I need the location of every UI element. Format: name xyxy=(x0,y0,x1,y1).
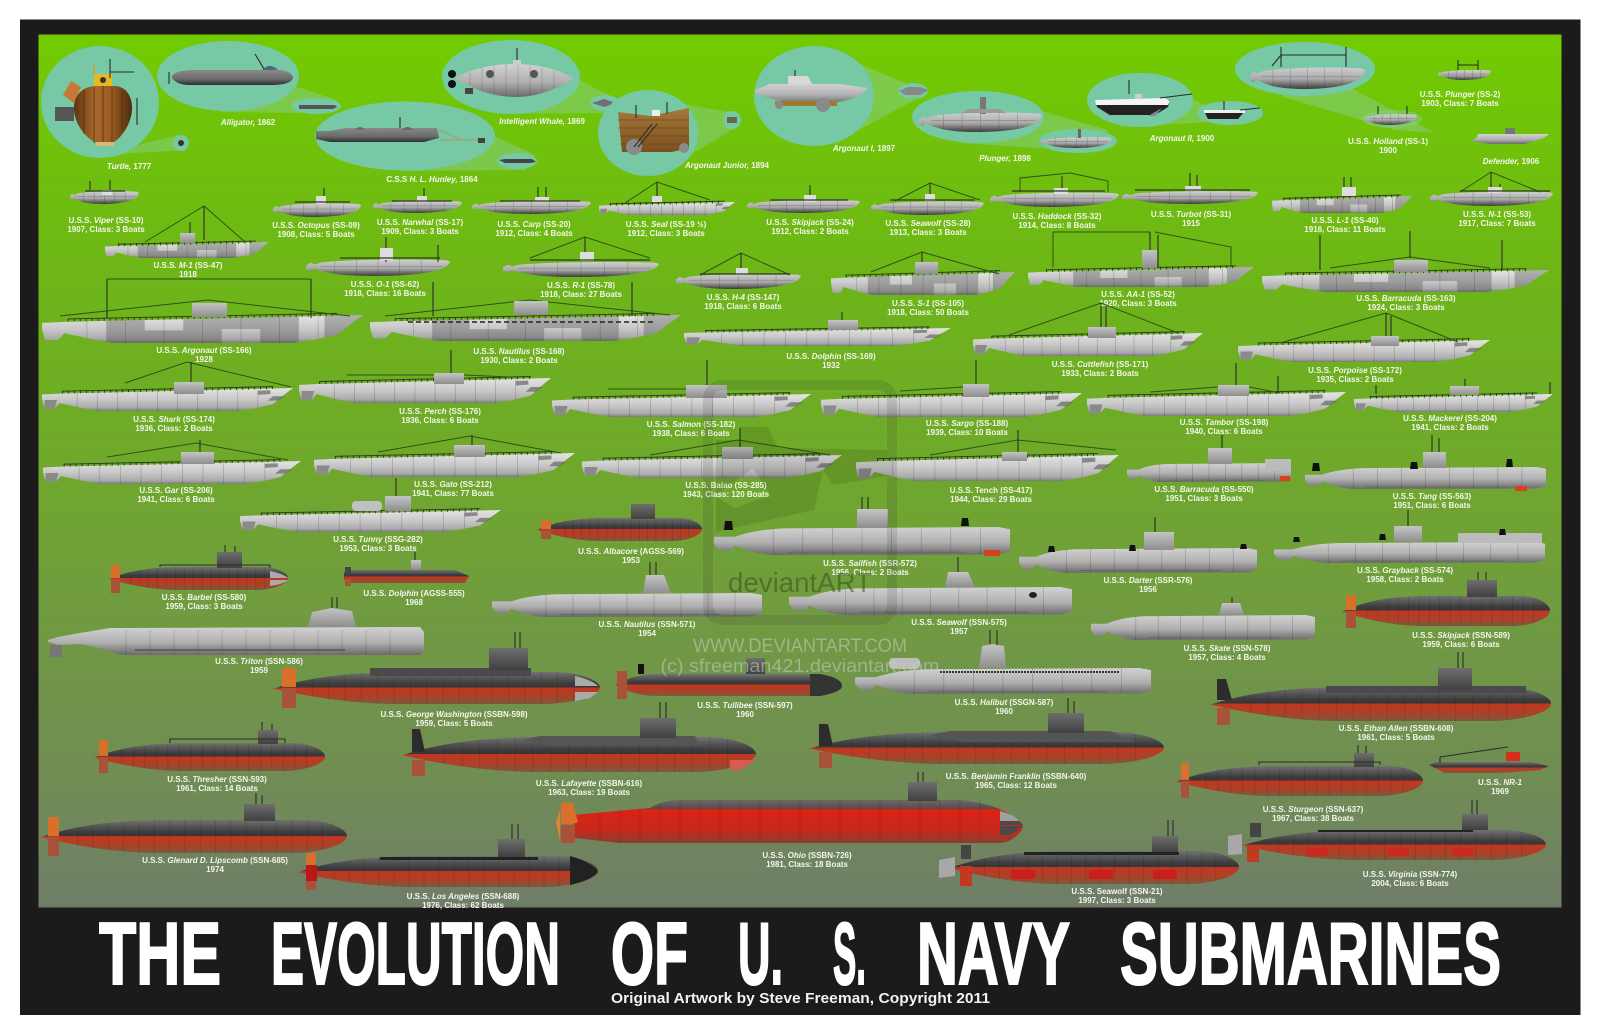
submarine: Tunny xyxy=(240,478,501,553)
caption: Argonaut II, 1900 xyxy=(1149,134,1215,143)
caption: U.S.S. Halibut (SSGN-587) xyxy=(955,698,1053,707)
caption: 1939, Class: 10 Boats xyxy=(926,428,1008,437)
watermark: site url: WWW.DEVIANTART.COM xyxy=(693,636,907,657)
caption: U.S.S. Sargo (SS-188) xyxy=(926,419,1008,428)
caption: U.S.S. Triton (SSN-586) xyxy=(215,657,303,666)
caption: U.S.S. Turbot (SS-31) xyxy=(1151,210,1231,219)
caption: U.S.S. Sturgeon (SSN-637) xyxy=(1263,805,1363,814)
caption: U.S.S. Argonaut (SS-166) xyxy=(156,346,252,355)
submarine: Barracuda SS-550 xyxy=(1127,435,1291,503)
caption: 1967, Class: 38 Boats xyxy=(1272,814,1354,823)
caption: 1941, Class: 2 Boats xyxy=(1411,423,1489,432)
submarine: Dolphin SS-169 xyxy=(684,312,951,370)
submarine: Carp xyxy=(472,187,591,238)
caption: U.S.S. Thresher (SSN-593) xyxy=(167,775,267,784)
caption: 1951, Class: 6 Boats xyxy=(1393,501,1471,510)
submarine: H-4 xyxy=(676,253,801,311)
submarine: Skipjack SS-24 xyxy=(747,185,860,236)
submarine: Turtle xyxy=(41,46,189,171)
caption: 1956 xyxy=(1139,585,1157,594)
submarine: Seal xyxy=(599,182,735,238)
caption: 1930, Class: 2 Boats xyxy=(480,356,558,365)
caption: U.S.S. NR-1 xyxy=(1478,778,1522,787)
caption: U.S.S. Tench (SS-417) xyxy=(950,486,1032,495)
caption: Argonaut I, 1897 xyxy=(832,144,896,153)
caption: U.S.S. Darter (SSR-576) xyxy=(1104,576,1192,585)
caption: 1976, Class: 62 Boats xyxy=(422,901,504,910)
caption: U.S.S. R-1 (SS-78) xyxy=(547,281,615,290)
caption: U.S.S. Nautilus (SS-168) xyxy=(473,347,565,356)
submarine: Barracuda SS-163 xyxy=(1262,231,1549,312)
caption: U.S.S. N-1 (SS-53) xyxy=(1463,210,1531,219)
caption: 1907, Class: 3 Boats xyxy=(67,225,145,234)
submarine: R-1 xyxy=(503,237,659,299)
submarine: Haddock xyxy=(990,173,1119,230)
caption: 1918, Class: 27 Boats xyxy=(540,290,622,299)
caption: U.S.S. S-1 (SS-105) xyxy=(892,299,964,308)
caption: 1941, Class: 6 Boats xyxy=(137,495,215,504)
submarine: L-1 xyxy=(1272,177,1412,234)
caption: 1918, Class: 50 Boats xyxy=(887,308,969,317)
submarine: Los Angeles xyxy=(298,824,598,910)
submarine: Mackerel xyxy=(1354,379,1553,432)
submarine: Gar xyxy=(43,440,301,504)
caption: 1908, Class: 5 Boats xyxy=(277,230,355,239)
title: S. xyxy=(833,904,866,1003)
caption: 1940, Class: 6 Boats xyxy=(1185,427,1263,436)
caption: U.S.S. O-1 (SS-62) xyxy=(351,280,419,289)
caption: U.S.S. Dolphin (SS-169) xyxy=(786,352,876,361)
submarine: Glenard D. Lipscomb xyxy=(41,793,347,874)
caption: 1959, Class: 3 Boats xyxy=(165,602,243,611)
caption: Defender, 1906 xyxy=(1483,157,1540,166)
submarine: Grayback xyxy=(1274,510,1545,584)
caption: 1912, Class: 2 Boats xyxy=(771,227,849,236)
caption: 1903, Class: 7 Boats xyxy=(1421,99,1499,108)
caption: 1954 xyxy=(638,629,656,638)
submarine: Plunger 1898 xyxy=(912,91,1117,163)
submarine: U.S.S. Holland xyxy=(1235,42,1435,155)
title: U. xyxy=(738,904,783,1003)
caption: 1974 xyxy=(206,865,224,874)
submarine: Narwhal xyxy=(373,188,463,236)
caption: U.S.S. L-1 (SS-40) xyxy=(1311,216,1379,225)
submarine: Darter xyxy=(1019,517,1257,594)
caption: U.S.S. Ohio (SSBN-726) xyxy=(762,851,852,860)
caption: U.S.S. Seawolf (SS-28) xyxy=(885,219,971,228)
caption: 1936, Class: 6 Boats xyxy=(401,416,479,425)
submarine: N-1 xyxy=(1430,172,1553,228)
caption: 1953 xyxy=(622,556,640,565)
submarine: Skate xyxy=(1091,597,1315,662)
submarine: AA-1 xyxy=(1028,232,1254,308)
title: OF xyxy=(611,904,688,1003)
submarine: Lafayette xyxy=(402,702,756,797)
submarine: Skipjack SSN-589 xyxy=(1342,572,1550,649)
caption: Turtle, 1777 xyxy=(107,162,152,171)
caption: 1928 xyxy=(195,355,213,364)
submarine: U.S.S. Plunger SS-2 xyxy=(1420,60,1501,108)
caption: U.S.S. Ethan Allen (SSBN-608) xyxy=(1339,724,1453,733)
submarine: Salmon xyxy=(552,360,811,438)
submarine: Halibut xyxy=(855,630,1151,716)
submarine: Intelligent Whale xyxy=(442,40,620,126)
submarine: Octopus xyxy=(272,188,361,239)
caption: 1956, Class: 2 Boats xyxy=(831,568,909,577)
caption: U.S.S. Balao (SS-285) xyxy=(685,481,767,490)
caption: U.S.S. Albacore (AGSS-569) xyxy=(578,547,684,556)
caption: U.S.S. Skipjack (SS-24) xyxy=(766,218,854,227)
caption: U.S.S. Salmon (SS-182) xyxy=(647,420,735,429)
submarine: Defender xyxy=(1472,128,1549,166)
caption: U.S.S. Grayback (SS-574) xyxy=(1357,566,1453,575)
submarine: Benjamin Franklin xyxy=(809,698,1164,790)
caption: 2004, Class: 6 Boats xyxy=(1371,879,1449,888)
caption: 1912, Class: 3 Boats xyxy=(627,229,705,238)
submarine: Sailfish xyxy=(714,497,1010,577)
caption: U.S.S. Seawolf (SSN-21) xyxy=(1071,887,1163,896)
caption: 1963, Class: 19 Boats xyxy=(548,788,630,797)
caption: Plunger, 1898 xyxy=(979,154,1031,163)
caption: Alligator, 1862 xyxy=(220,118,276,127)
caption: U.S.S. Shark (SS-174) xyxy=(133,415,215,424)
caption: 1965, Class: 12 Boats xyxy=(975,781,1057,790)
submarine: Shark xyxy=(42,362,293,433)
caption: U.S.S. H-4 (SS-147) xyxy=(707,293,779,302)
caption: U.S.S. AA-1 (SS-52) xyxy=(1101,290,1175,299)
submarine: Ohio xyxy=(556,772,1023,869)
credit line: Original Artwork by Steve Freeman, Copyright 2011 xyxy=(611,991,990,1007)
caption: C.S.S H. L. Hunley, 1864 xyxy=(386,175,478,184)
submarine: George Washington xyxy=(273,632,600,728)
caption: U.S.S. Narwhal (SS-17) xyxy=(377,218,463,227)
caption: U.S.S. Tambor (SS-198) xyxy=(1180,418,1268,427)
submarine: Ethan Allen xyxy=(1210,652,1551,742)
submarine: Cuttlefish xyxy=(973,303,1203,378)
caption: U.S.S. Perch (SS-176) xyxy=(399,407,481,416)
caption: 1924, Class: 3 Boats xyxy=(1367,303,1445,312)
submarine: Tambor xyxy=(1087,363,1346,436)
submarine: Alligator xyxy=(157,41,341,127)
submarine: Viper xyxy=(67,180,145,234)
caption: U.S.S. Gar (SS-206) xyxy=(139,486,213,495)
caption: 1960 xyxy=(736,710,754,719)
submarine: Gato xyxy=(314,435,575,498)
caption: 1920, Class: 3 Boats xyxy=(1099,299,1177,308)
watermark: deviantART logo xyxy=(708,385,892,620)
submarine: O-1 xyxy=(306,237,450,298)
submarine: Seawolf SS-28 xyxy=(871,183,984,237)
caption: U.S.S. Sailfish (SSR-572) xyxy=(823,559,917,568)
caption: 1913, Class: 3 Boats xyxy=(889,228,967,237)
caption: U.S.S. Nautilus (SSN-571) xyxy=(599,620,695,629)
caption: U.S.S. Glenard D. Lipscomb (SSN-685) xyxy=(142,856,288,865)
caption: 1981, Class: 18 Boats xyxy=(766,860,848,869)
caption: U.S.S. Seal (SS-19 ½) xyxy=(626,220,706,229)
caption: 1909, Class: 3 Boats xyxy=(381,227,459,236)
title: EVOLUTION xyxy=(271,904,560,1003)
caption: 1959, Class: 6 Boats xyxy=(1422,640,1500,649)
submarine: Argonaut SS-166 xyxy=(42,279,363,364)
title xyxy=(99,904,1501,1003)
submarine: Dolphin AGSS xyxy=(344,552,469,607)
submarine: Seawolf SSN-21 xyxy=(939,820,1239,905)
caption: 1944, Class: 29 Boats xyxy=(950,495,1032,504)
caption: U.S.S. Barracuda (SS-550) xyxy=(1154,485,1254,494)
caption: 1959, Class: 5 Boats xyxy=(415,719,493,728)
submarine: Balao xyxy=(582,428,842,499)
submarine: Virginia xyxy=(1228,800,1546,888)
caption: U.S.S. Skate (SSN-578) xyxy=(1184,644,1270,653)
caption: U.S.S. Tullibee (SSN-597) xyxy=(697,701,793,710)
submarine: Thresher xyxy=(94,722,325,793)
caption: U.S.S. Barracuda (SS-163) xyxy=(1356,294,1456,303)
caption: 1915 xyxy=(1182,219,1200,228)
caption: U.S.S. Skipjack (SSN-589) xyxy=(1412,631,1510,640)
caption: 1957, Class: 4 Boats xyxy=(1188,653,1266,662)
caption: U.S.S. Plunger (SS-2) xyxy=(1420,90,1500,99)
caption: U.S.S. Carp (SS-20) xyxy=(497,220,571,229)
caption: U.S.S. Lafayette (SSBN-616) xyxy=(536,779,642,788)
submarine: Nautilus SSN xyxy=(492,562,762,638)
submarine: Albacore xyxy=(537,504,702,565)
submarine: Porpoise xyxy=(1238,313,1490,384)
caption: U.S.S. Barbel (SS-580) xyxy=(162,593,246,602)
caption: 1938, Class: 6 Boats xyxy=(652,429,730,438)
caption: U.S.S. Dolphin (AGSS-555) xyxy=(363,589,465,598)
title: NAVY xyxy=(917,904,1070,1003)
caption: 1943, Class: 120 Boats xyxy=(683,490,770,499)
caption: U.S.S. Haddock (SS-32) xyxy=(1013,212,1101,221)
caption: U.S.S. Seawolf (SSN-575) xyxy=(911,618,1007,627)
caption: U.S.S. Mackerel (SS-204) xyxy=(1403,414,1497,423)
submarine: Seawolf SSN-575 xyxy=(789,557,1072,636)
caption: U.S.S. George Washington (SSBN-598) xyxy=(380,710,528,719)
submarine: Perch xyxy=(299,350,551,425)
caption: 1959 xyxy=(250,666,268,675)
caption: 1933, Class: 2 Boats xyxy=(1061,369,1139,378)
submarine: Sargo xyxy=(821,360,1082,437)
caption: U.S.S. Porpoise (SS-172) xyxy=(1308,366,1402,375)
caption: Argonaut Junior, 1894 xyxy=(684,161,770,170)
caption: 1997, Class: 3 Boats xyxy=(1078,896,1156,905)
caption: U.S.S. Tunny (SSG-282) xyxy=(333,535,423,544)
submarine: Argonaut Junior xyxy=(598,90,770,176)
submarine: Barbel xyxy=(109,545,288,611)
caption: 1935, Class: 2 Boats xyxy=(1316,375,1394,384)
caption: 1918 xyxy=(179,270,197,279)
submarine: S-1 xyxy=(831,252,1015,317)
submarine: Argonaut I xyxy=(754,46,928,153)
caption: 1932 xyxy=(822,361,840,370)
caption: 1969 xyxy=(1491,787,1509,796)
submarine: C.S.S. H. L. Hunley xyxy=(315,102,537,184)
submarine: Triton xyxy=(48,597,424,675)
submarine: NR-1 xyxy=(1429,747,1549,796)
caption: 1958, Class: 2 Boats xyxy=(1366,575,1444,584)
caption: 1917, Class: 7 Boats xyxy=(1458,219,1536,228)
caption: 1960 xyxy=(995,707,1013,716)
caption: 1961, Class: 5 Boats xyxy=(1357,733,1435,742)
caption: 1918, Class: 16 Boats xyxy=(344,289,426,298)
caption: Intelligent Whale, 1869 xyxy=(499,117,585,126)
caption: 1912, Class: 4 Boats xyxy=(495,229,573,238)
submarine: Nautilus SS-168 xyxy=(370,282,681,365)
caption: 1968 xyxy=(405,598,423,607)
title: THE xyxy=(99,904,221,1003)
watermark: copyright: (c) sfreeman421.deviantart.com xyxy=(660,656,940,676)
caption: U.S.S. Holland (SS-1) xyxy=(1348,137,1428,146)
caption: U.S.S. Benjamin Franklin (SSBN-640) xyxy=(946,772,1086,781)
caption: U.S.S. Virginia (SSN-774) xyxy=(1363,870,1457,879)
caption: U.S.S. Gato (SS-212) xyxy=(414,480,492,489)
caption: U.S.S. Tang (SS-563) xyxy=(1393,492,1471,501)
submarine: Tench xyxy=(856,430,1119,504)
submarine: Tang xyxy=(1305,435,1546,510)
caption: 1916, Class: 11 Boats xyxy=(1304,225,1386,234)
caption: U.S.S. M-1 (SS-47) xyxy=(154,261,222,270)
caption: 1951, Class: 3 Boats xyxy=(1165,494,1243,503)
submarine: M-1 xyxy=(105,206,269,279)
submarine: Sturgeon xyxy=(1176,745,1423,823)
caption: 1918, Class: 6 Boats xyxy=(704,302,782,311)
submarine: Tullibee xyxy=(615,658,842,719)
caption: 1941, Class: 77 Boats xyxy=(412,489,494,498)
watermark text: deviantART xyxy=(728,567,872,598)
caption: 1914, Class: 8 Boats xyxy=(1018,221,1096,230)
caption: U.S.S. Los Angeles (SSN-688) xyxy=(407,892,519,901)
submarine: Argonaut II xyxy=(1087,73,1263,143)
caption: 1961, Class: 14 Boats xyxy=(176,784,258,793)
caption: U.S.S. Cuttlefish (SS-171) xyxy=(1052,360,1148,369)
caption: 1936, Class: 2 Boats xyxy=(135,424,213,433)
submarine: Turbot xyxy=(1122,173,1258,228)
caption: U.S.S. Viper (SS-10) xyxy=(69,216,143,225)
caption: 1900 xyxy=(1379,146,1397,155)
caption: 1953, Class: 3 Boats xyxy=(339,544,417,553)
panel: early submarines with scale bubbles xyxy=(41,40,1553,910)
caption: 1957 xyxy=(950,627,968,636)
caption: U.S.S. Octopus (SS-09) xyxy=(272,221,360,230)
